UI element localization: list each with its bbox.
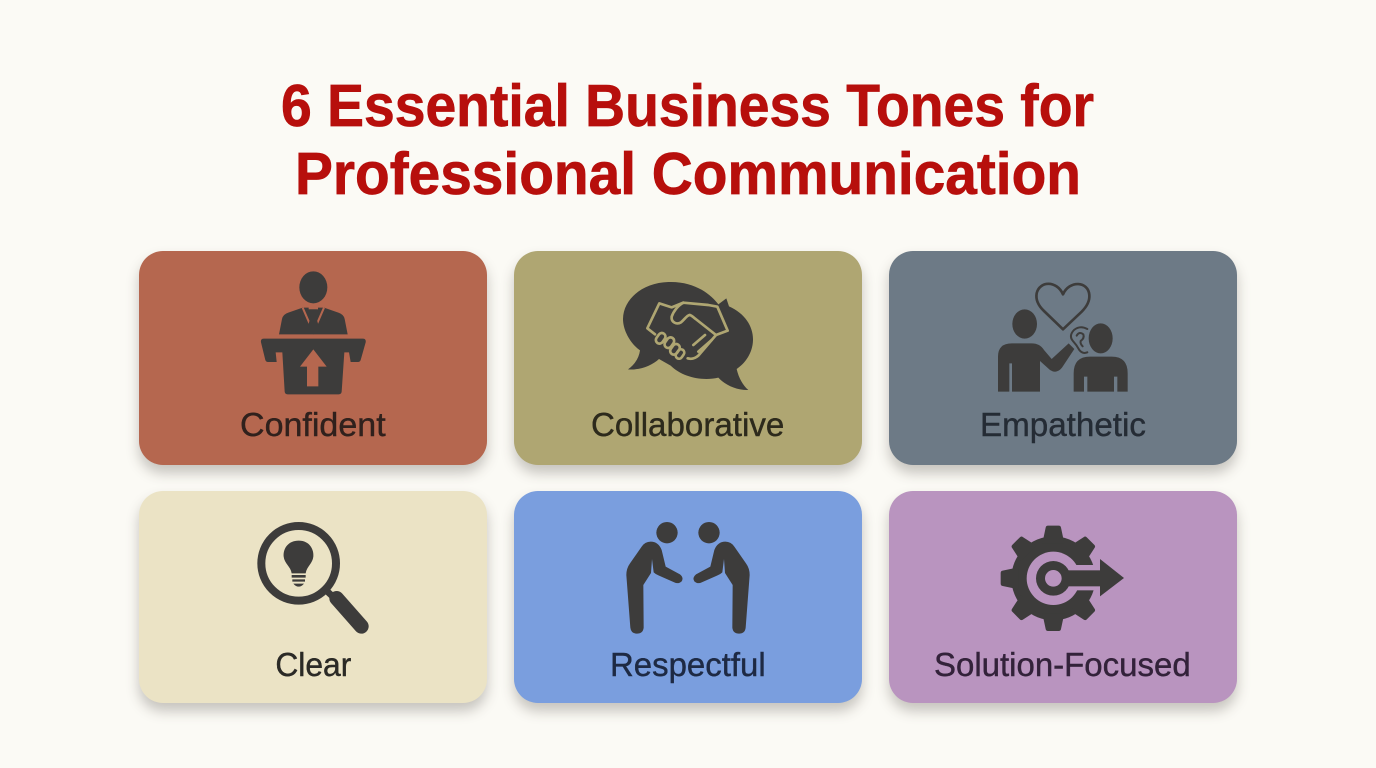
icon: magnifier with light bulb bbox=[261, 526, 361, 626]
panel: Solution-Focused bbox=[889, 491, 1237, 703]
panel: Respectful bbox=[514, 491, 862, 703]
panel: Clear bbox=[139, 491, 487, 703]
label: Confident: Confident bbox=[240, 407, 386, 444]
title: Professional Communication bbox=[295, 141, 1081, 207]
label: Empathetic: Empathetic bbox=[980, 407, 1146, 444]
icon: gear with arrow bbox=[1001, 526, 1124, 631]
label: Respectful: Respectful bbox=[610, 647, 766, 684]
panel: Empathetic bbox=[889, 251, 1237, 465]
panel: Collaborative bbox=[514, 251, 862, 465]
icon: listening with heart bbox=[998, 284, 1128, 392]
icon: handshake in speech bubbles bbox=[623, 282, 753, 390]
label: Solution-Focused: Solution-Focused bbox=[934, 647, 1191, 684]
panel: Confident bbox=[139, 251, 487, 465]
label: Clear: Clear bbox=[275, 647, 351, 684]
title bbox=[281, 73, 1094, 207]
icon: speaker at podium bbox=[261, 271, 366, 394]
label: Collaborative: Collaborative bbox=[591, 407, 784, 444]
title: 6 Essential Business Tones for bbox=[281, 73, 1094, 139]
icon: two people bowing bbox=[626, 522, 750, 634]
